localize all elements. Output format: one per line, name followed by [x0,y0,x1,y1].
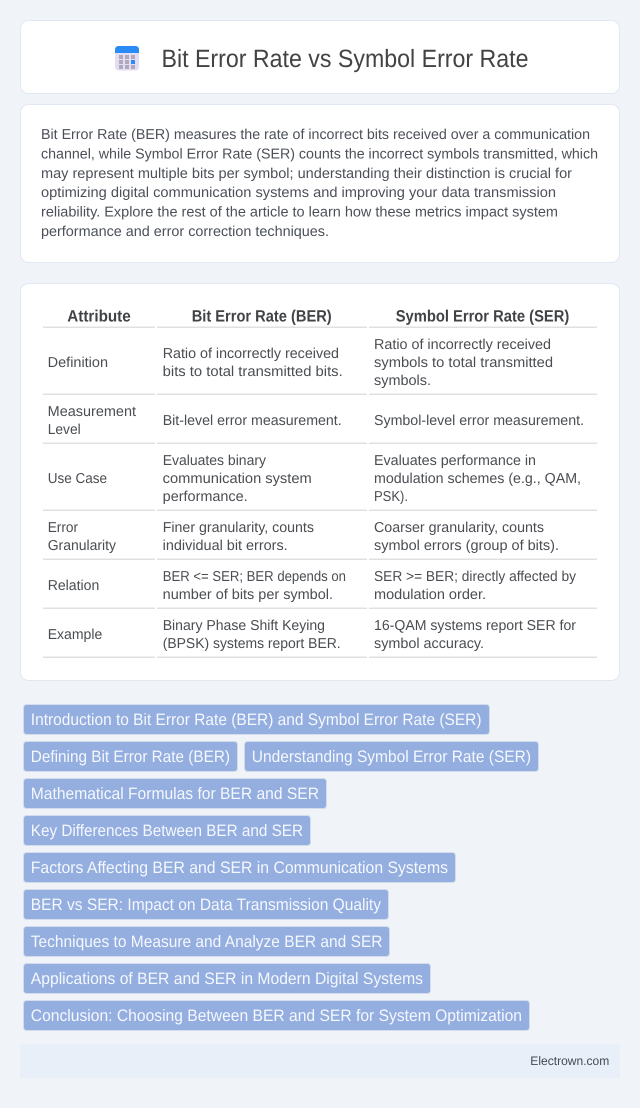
row: definition [48,337,553,389]
tag: applications [24,964,430,994]
tag: understanding SER [244,742,538,772]
table header row: Symbol Error Rate (SER) [396,308,569,326]
intro panel [20,104,620,262]
tag: techniques: Techniques to Measure and Analyze BER and SER [31,932,383,951]
tag: applications: Applications of BER and SER in Modern Digital Systems [31,969,423,988]
intro text: may represent multiple bits per symbol; understanding their distinction is crucial for [41,166,572,182]
tag: introduction: Introduction to Bit Error Rate (BER) and Symbol Error Rate (SER) [31,710,482,729]
row: relation: BER <= SER; BER depends on [163,569,346,585]
row: definition: Definition [48,355,108,371]
row: relation: number of bits per symbol. [163,587,333,603]
row: use case: performance. [163,489,248,505]
table header row: Bit Error Rate (BER) [192,308,332,326]
row: example: (BPSK) systems report BER. [163,636,341,652]
tag: formulas [24,778,326,808]
row: error granularity: symbol errors (group of bits). [374,538,559,554]
row: use case: modulation schemes (e.g., QAM, [374,471,581,487]
row: use case: PSK). [374,489,408,505]
tag: factors [24,852,456,882]
row: use case [48,453,581,505]
tag: key differences: Key Differences Between BER and SER [31,821,303,840]
row: example: Binary Phase Shift Keying [163,618,325,634]
row: example: 16-QAM systems report SER for [374,618,576,634]
row: measurement level [48,404,584,438]
row: use case: Evaluates binary [163,453,267,469]
row: measurement level: Level [48,422,81,438]
row: definition: Ratio of incorrectly received [163,346,339,362]
row: relation [48,569,577,603]
row: relation: Relation [48,578,99,594]
tag: defining BER [24,742,238,772]
footer [20,1044,620,1078]
tag: introduction [24,704,490,734]
row: error granularity: Finer granularity, counts [163,520,314,536]
footer credit: Electrown.com [530,1054,609,1068]
row: definition: symbols. [374,373,431,389]
icon: calendar grid [115,46,139,70]
intro text: reliability. Explore the rest of the article to learn how these metrics impact system [41,204,558,220]
tag: understanding SER: Understanding Symbol Error Rate (SER) [252,747,531,766]
intro text: optimizing digital communication systems and improving your data transmission [41,185,556,201]
row: error granularity [48,520,559,554]
tag: techniques [24,926,390,956]
header panel [20,20,620,94]
intro text: Bit Error Rate (BER) measures the rate of incorrect bits received over a communication [41,127,590,143]
tag: impact [24,890,388,920]
topic tags [24,704,538,1030]
row: use case: communication system [163,471,312,487]
row: definition: symbols to total transmitted [374,355,553,371]
row: relation: SER >= BER; directly affected by [374,569,577,585]
row: use case: Use Case [48,471,107,487]
row: error granularity: Error [48,520,78,536]
title: Bit Error Rate vs Symbol Error Rate [162,45,528,73]
row: example: symbol accuracy. [374,636,484,652]
row: measurement level: Bit-level error measurement. [163,413,342,429]
table header row: Attribute [67,308,131,326]
tag: conclusion [24,1000,530,1030]
row: measurement level: Symbol-level error measurement. [374,413,584,429]
tag: factors: Factors Affecting BER and SER in Communication Systems [31,858,448,877]
row: measurement level: Measurement [48,404,136,420]
row: example: Example [48,627,102,643]
tag: defining BER: Defining Bit Error Rate (BER) [31,747,230,766]
row: error granularity: Granularity [48,538,117,554]
tag: formulas: Mathematical Formulas for BER and SER [31,784,319,803]
row: relation: modulation order. [374,587,486,603]
row: error granularity: Coarser granularity, counts [374,520,544,536]
tag: impact: BER vs SER: Impact on Data Transmission Quality [31,895,382,914]
tag: key differences [24,816,310,846]
row: example [48,618,576,652]
intro text: performance and error correction techniques. [41,224,329,240]
table header row [67,308,569,326]
row: definition: Ratio of incorrectly received [374,337,551,353]
row: definition: bits to total transmitted bits. [163,364,343,380]
row: use case: Evaluates performance in [374,453,536,469]
intro text [41,127,598,240]
comparison table panel [20,284,620,680]
tag: conclusion: Conclusion: Choosing Between BER and SER for System Optimization [31,1006,522,1025]
row: error granularity: individual bit errors. [163,538,288,554]
intro text: channel, while Symbol Error Rate (SER) counts the incorrect symbols transmitted, which [41,146,598,162]
